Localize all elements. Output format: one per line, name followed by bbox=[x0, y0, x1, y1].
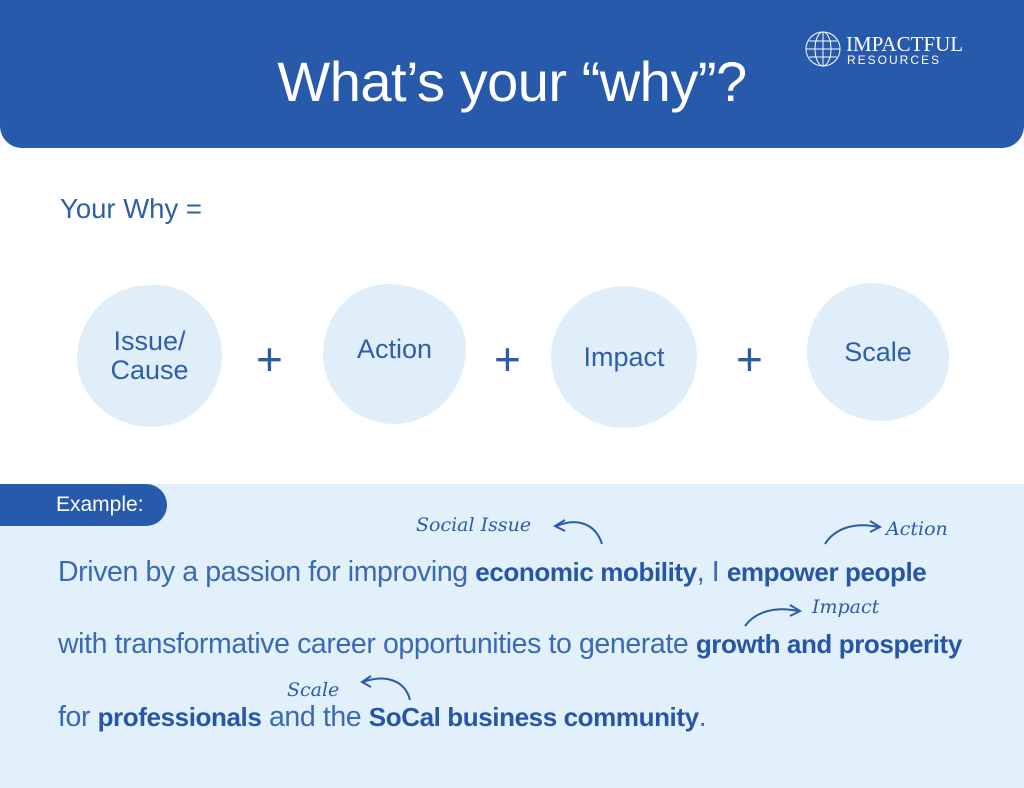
example panel: Action bbox=[886, 518, 948, 540]
blob: issue: Issue/ bbox=[113, 326, 186, 356]
formula: blobs: + bbox=[494, 333, 521, 385]
logo: RESOURCES bbox=[847, 53, 941, 67]
logo: IMPACTFUL bbox=[846, 32, 963, 56]
blob: action: Action bbox=[357, 334, 432, 364]
example panel bbox=[0, 484, 1024, 788]
formula: blobs bbox=[77, 283, 949, 428]
example pill bbox=[0, 484, 167, 526]
blob: scale bbox=[807, 283, 949, 421]
icon: globe bbox=[806, 32, 840, 66]
example panel: Impact bbox=[812, 596, 879, 618]
example text: Driven by a passion for improving economic mobility, I empower people bbox=[58, 556, 926, 588]
blob: impact bbox=[551, 286, 697, 428]
annotation: action bbox=[824, 520, 882, 544]
formula: blobs: + bbox=[256, 333, 283, 385]
logo bbox=[806, 32, 963, 67]
blob: issue: Cause bbox=[110, 355, 189, 385]
example panel: with transformative career opportunities to generate growth and prosperity bbox=[58, 628, 962, 660]
annotation: social issue: Social Issue bbox=[416, 514, 531, 536]
example pill: Example: bbox=[56, 493, 144, 516]
blob: action bbox=[323, 284, 466, 424]
title: What’s your “why”? bbox=[277, 50, 747, 113]
blob: scale: Scale bbox=[844, 336, 912, 366]
formula: blobs: + bbox=[736, 333, 763, 385]
formula label: Your Why = bbox=[60, 193, 202, 224]
blob: impact: Impact bbox=[583, 342, 665, 372]
header band bbox=[0, 0, 1024, 148]
annotation: impact bbox=[744, 604, 802, 627]
blob: issue bbox=[77, 285, 222, 427]
example panel: for professionals and the SoCal business community. bbox=[58, 701, 706, 733]
annotation: scale: Scale bbox=[287, 679, 339, 701]
